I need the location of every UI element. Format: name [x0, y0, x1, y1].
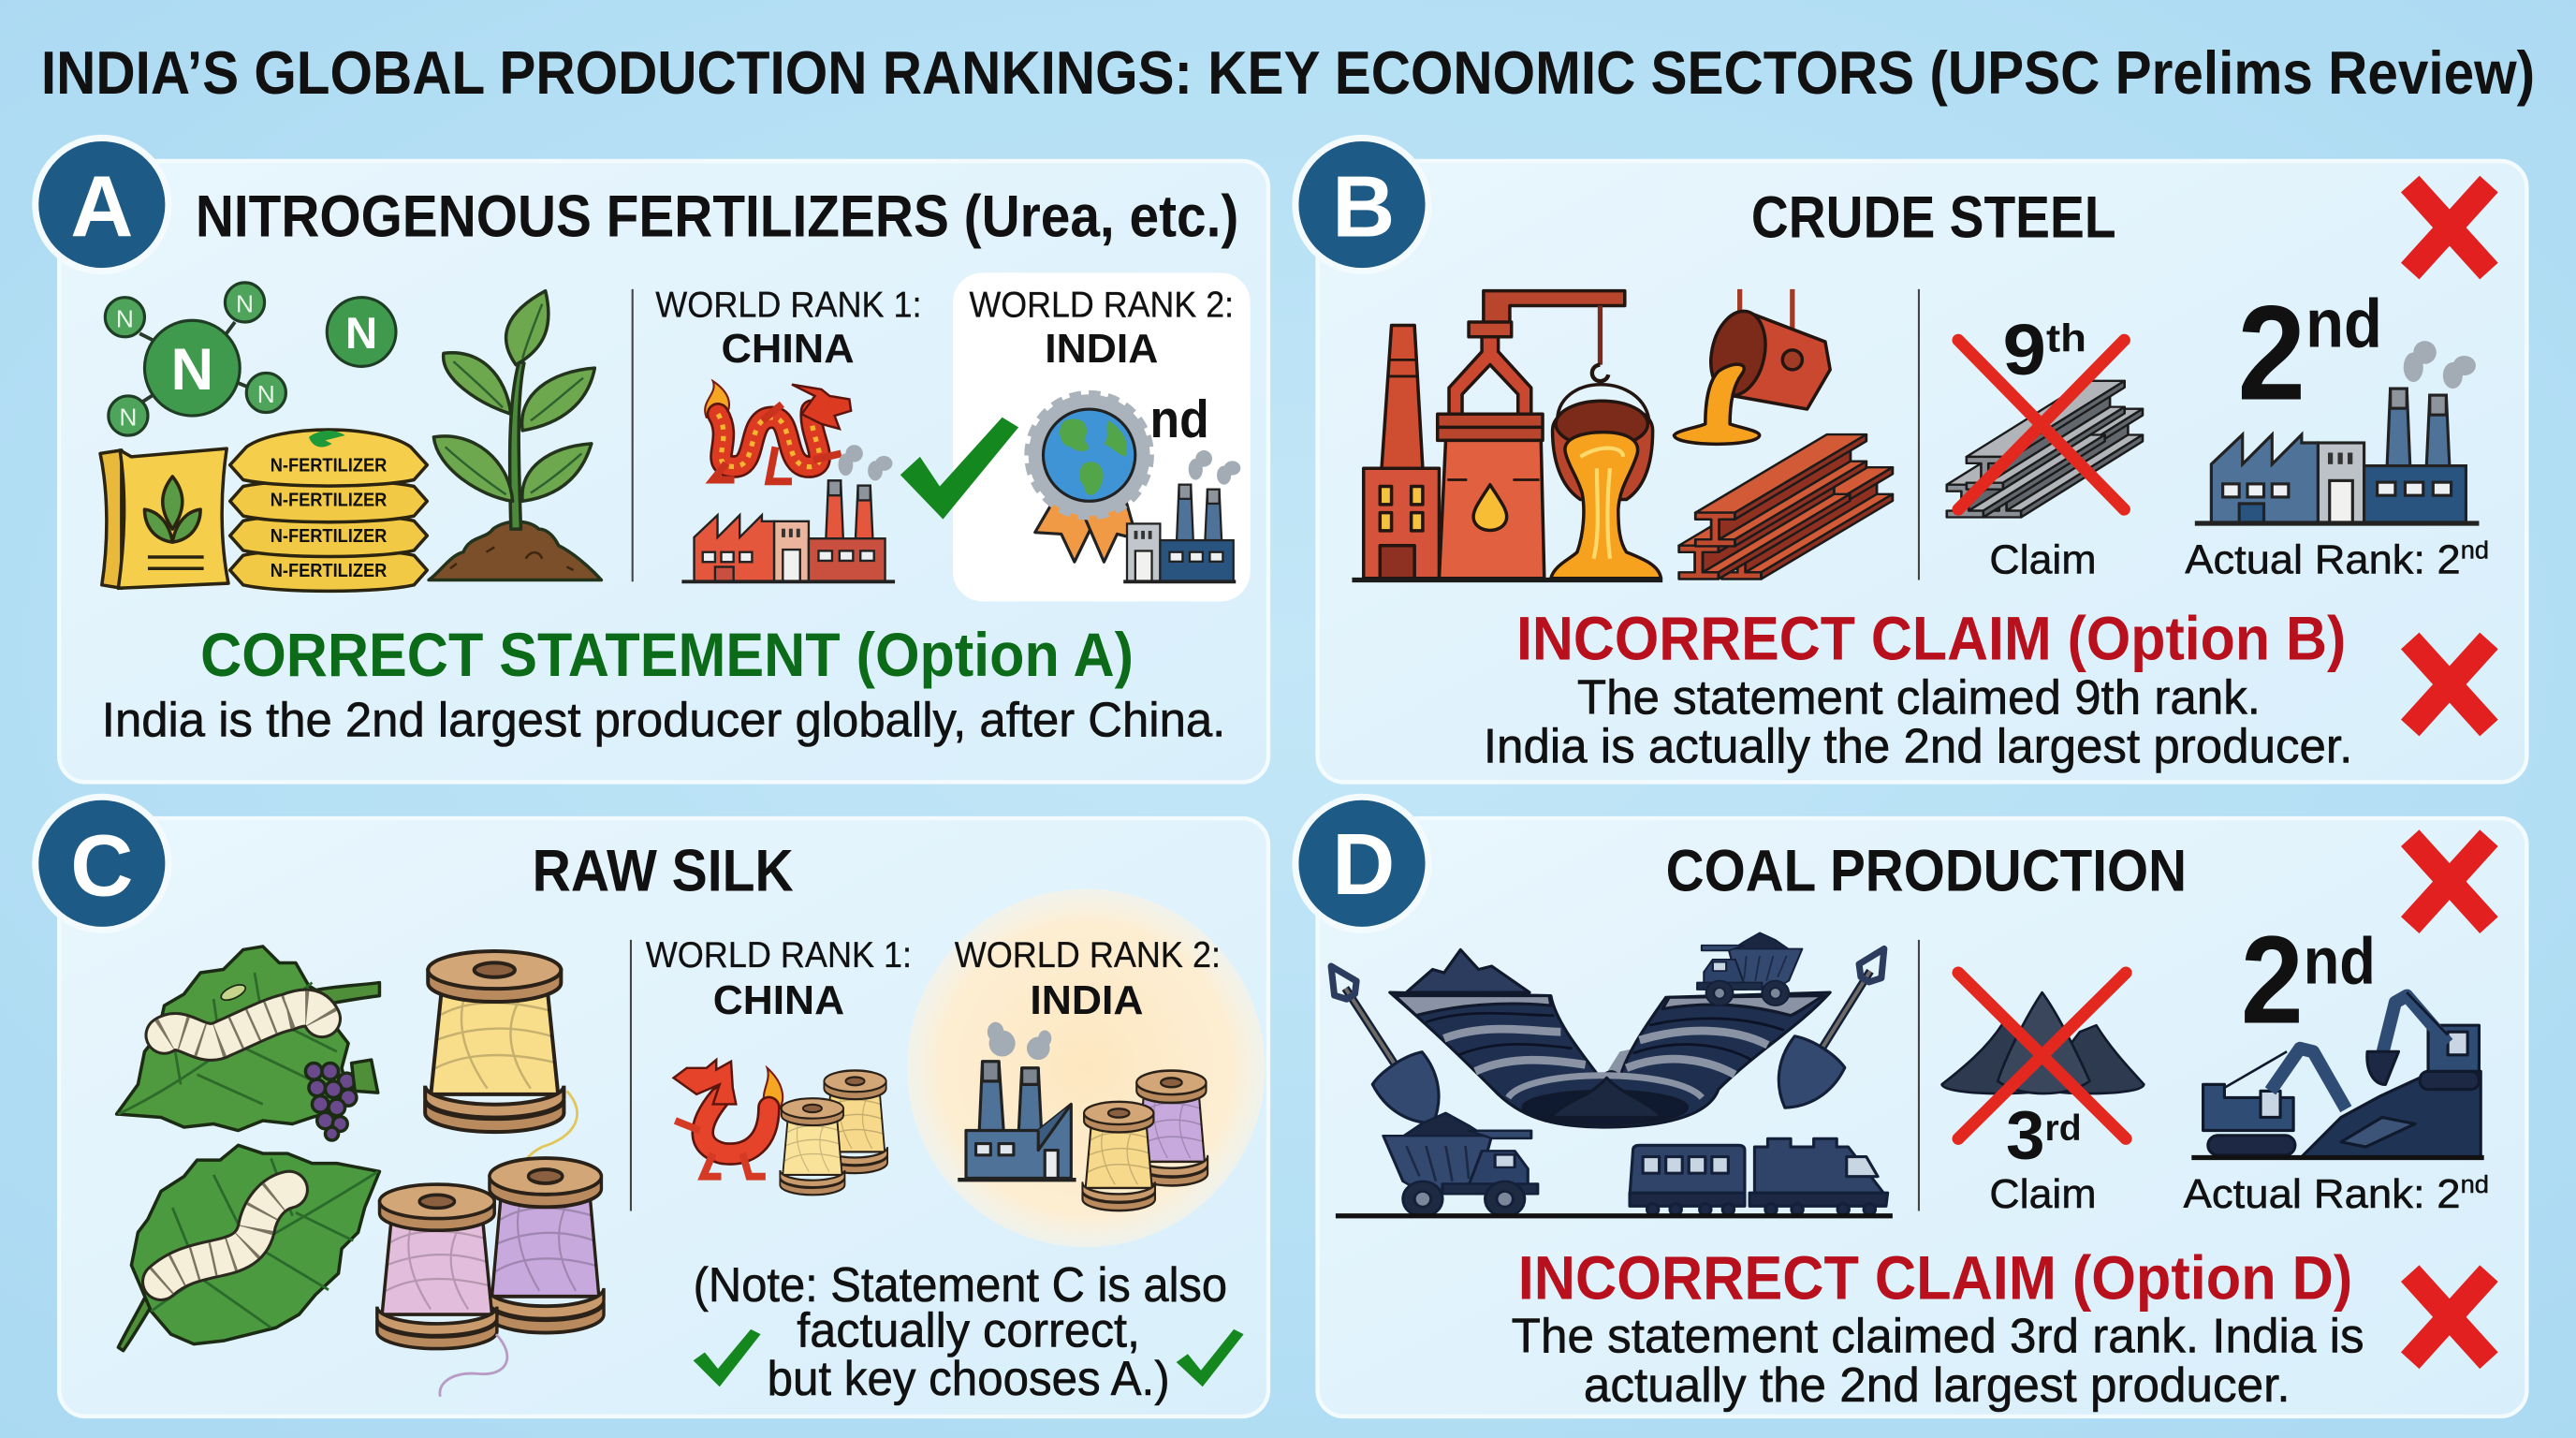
icon: red dragon	[705, 381, 851, 481]
label: world rank 1 China	[655, 286, 922, 372]
icon: right shovel	[1760, 932, 1910, 1123]
verdict: correct statement: CORRECT STATEMENT (Option A)	[200, 620, 1134, 689]
icon: excavators on coal hill	[2191, 992, 2484, 1157]
label: world rank 1 China C: WORLD RANK 1:	[646, 935, 912, 976]
icon: small check right	[1177, 1329, 1244, 1387]
badge: B: B	[1332, 158, 1395, 256]
heading: D: COAL PRODUCTION	[1666, 838, 2187, 903]
panel: C raw silk	[36, 797, 1268, 1416]
icon: nitrogen molecules: N	[345, 309, 377, 359]
label: 2nd large D: nd	[2304, 923, 2376, 997]
label: 3rd: 3	[2006, 1095, 2044, 1173]
icon: nitrogen molecules: N	[257, 380, 275, 408]
icon: open pit coal mine	[1390, 949, 1830, 1127]
label: world rank 2 India C: WORLD RANK 2:	[955, 935, 1221, 976]
label: claim B: Claim	[1989, 537, 2097, 583]
icon: nitrogen molecules: N	[236, 289, 254, 317]
icon: red cross	[2410, 184, 2489, 271]
icon: red cross bottom	[2410, 640, 2489, 728]
text: note	[694, 1257, 1227, 1405]
icon: red steel beams	[1352, 434, 1893, 580]
panel: D coal production	[1295, 797, 2526, 1416]
icon: fertilizer sack	[100, 448, 228, 588]
badge: B	[1295, 138, 1428, 271]
icon: dragon with spools	[674, 1060, 887, 1195]
icon: pouring bucket	[1674, 289, 1830, 444]
label: world rank 1 China C	[646, 935, 912, 1023]
text: nd: nd	[1150, 389, 1209, 448]
icon: nitrogen molecules: N	[119, 404, 137, 432]
icon: mulberry leaf with silkworm	[117, 946, 379, 1140]
icon: big check mark	[900, 418, 1018, 520]
label: world rank 1 China: CHINA	[721, 326, 855, 372]
text: explanation B: India is actually the 2nd largest producer.	[1484, 718, 2352, 772]
icon: yellow silk spool	[425, 951, 578, 1170]
label: 2nd large: nd	[2305, 284, 2382, 361]
icon: stack of N-fertilizer bags: N-FERTILIZER	[271, 561, 388, 581]
badge: C: C	[70, 817, 133, 915]
icon: stack of N-fertilizer bags: N-FERTILIZER	[271, 526, 388, 547]
text: explanation D: actually the 2nd largest producer.	[1584, 1357, 2291, 1412]
panel: A nitrogenous fertilizers	[36, 138, 1268, 782]
icon: small dump truck on rim	[1697, 932, 1802, 1005]
panel: B crude steel	[1295, 138, 2526, 782]
text: note: but key chooses A.)	[768, 1351, 1170, 1405]
icon: small check left	[694, 1329, 761, 1387]
icon: red cross D	[2410, 838, 2489, 925]
label: actual rank D: nd	[2461, 1170, 2489, 1198]
label: world rank 2 India C: INDIA	[1030, 977, 1144, 1023]
label: world rank 2 India: WORLD RANK 2:	[970, 286, 1234, 326]
badge: A: A	[70, 158, 133, 256]
icon: nitrogen molecules: N	[171, 337, 213, 403]
icon: hanging ladle pouring molten steel	[1551, 305, 1661, 579]
label: actual rank D: Actual Rank: 2	[2184, 1171, 2451, 1217]
icon: globe medal with ribbon	[1029, 394, 1150, 562]
label: 2nd large D: 2	[2241, 911, 2310, 1050]
heading: C: RAW SILK	[533, 838, 794, 903]
label: claim D: Claim	[1989, 1171, 2097, 1217]
icon: blue factory actual	[2195, 341, 2479, 523]
icon: large dump truck	[1383, 1113, 1538, 1217]
badge: C	[36, 797, 168, 930]
icon: stack of N-fertilizer bags: N-FERTILIZER	[271, 456, 388, 477]
badge: D: D	[1332, 815, 1395, 913]
text: explanation D: The statement claimed 3rd rank. India is	[1512, 1308, 2364, 1362]
badge: D	[1295, 797, 1428, 930]
label: 3rd: rd	[2045, 1108, 2082, 1149]
text: explanation D	[1512, 1308, 2364, 1412]
text: note: (Note: Statement C is also	[694, 1257, 1227, 1312]
label: actual rank B: nd	[2461, 536, 2489, 565]
text: note: factually correct,	[797, 1302, 1140, 1357]
icon: thin red cross D	[1958, 973, 2126, 1138]
icon: left shovel	[1306, 950, 1458, 1139]
icon: coal train	[1336, 1138, 1893, 1216]
icon: red cross D bottom	[2410, 1273, 2489, 1360]
icon: Indian factory with spools	[958, 1022, 1208, 1211]
icon: steel plant	[1364, 291, 1625, 579]
label: 9th: 9	[2002, 310, 2042, 390]
icon: stack of N-fertilizer bags: N-FERTILIZER	[271, 491, 388, 511]
icon: stack of N-fertilizer bags	[230, 430, 427, 591]
icon: blue factory	[1123, 450, 1240, 581]
heading: A: NITROGENOUS FERTILIZERS (Urea, etc.)	[196, 184, 1238, 250]
icon: second leaf with silkworm	[118, 1145, 379, 1351]
label: world rank 2 India: INDIA	[1045, 326, 1158, 372]
icon: purple and pink silk spools	[377, 1158, 604, 1397]
label: 9th: th	[2046, 316, 2086, 360]
label: world rank 2 India C	[955, 935, 1221, 1023]
highlight box: India	[953, 272, 1251, 601]
heading: B: CRUDE STEEL	[1751, 185, 2116, 251]
icon: red factory	[681, 445, 895, 581]
icon: grey steel beams	[1947, 381, 2143, 518]
label: world rank 1 China: WORLD RANK 1:	[655, 286, 922, 326]
badge: A	[36, 138, 168, 271]
icon: nitrogen molecules	[105, 283, 396, 435]
verdict: incorrect claim D: INCORRECT CLAIM (Option D)	[1518, 1242, 2352, 1312]
label: world rank 2 India	[970, 286, 1234, 372]
highlight glow: India	[907, 889, 1265, 1247]
label: actual rank B: Actual Rank: 2	[2185, 537, 2452, 583]
label: world rank 1 China C: CHINA	[713, 977, 844, 1023]
text: explanation A: India is the 2nd largest producer globally, after China.	[102, 692, 1225, 746]
text: explanation B: The statement claimed 9th rank.	[1577, 670, 2261, 725]
text: explanation B	[1484, 670, 2352, 772]
icon: plant in soil	[429, 291, 601, 580]
icon: coal pile	[1942, 992, 2144, 1093]
verdict: incorrect claim B: INCORRECT CLAIM (Option B)	[1516, 604, 2346, 673]
icon: nitrogen molecules: N	[116, 304, 134, 332]
label: 2nd large: 2	[2237, 278, 2312, 428]
icon: thin red cross over claim	[1958, 340, 2124, 509]
